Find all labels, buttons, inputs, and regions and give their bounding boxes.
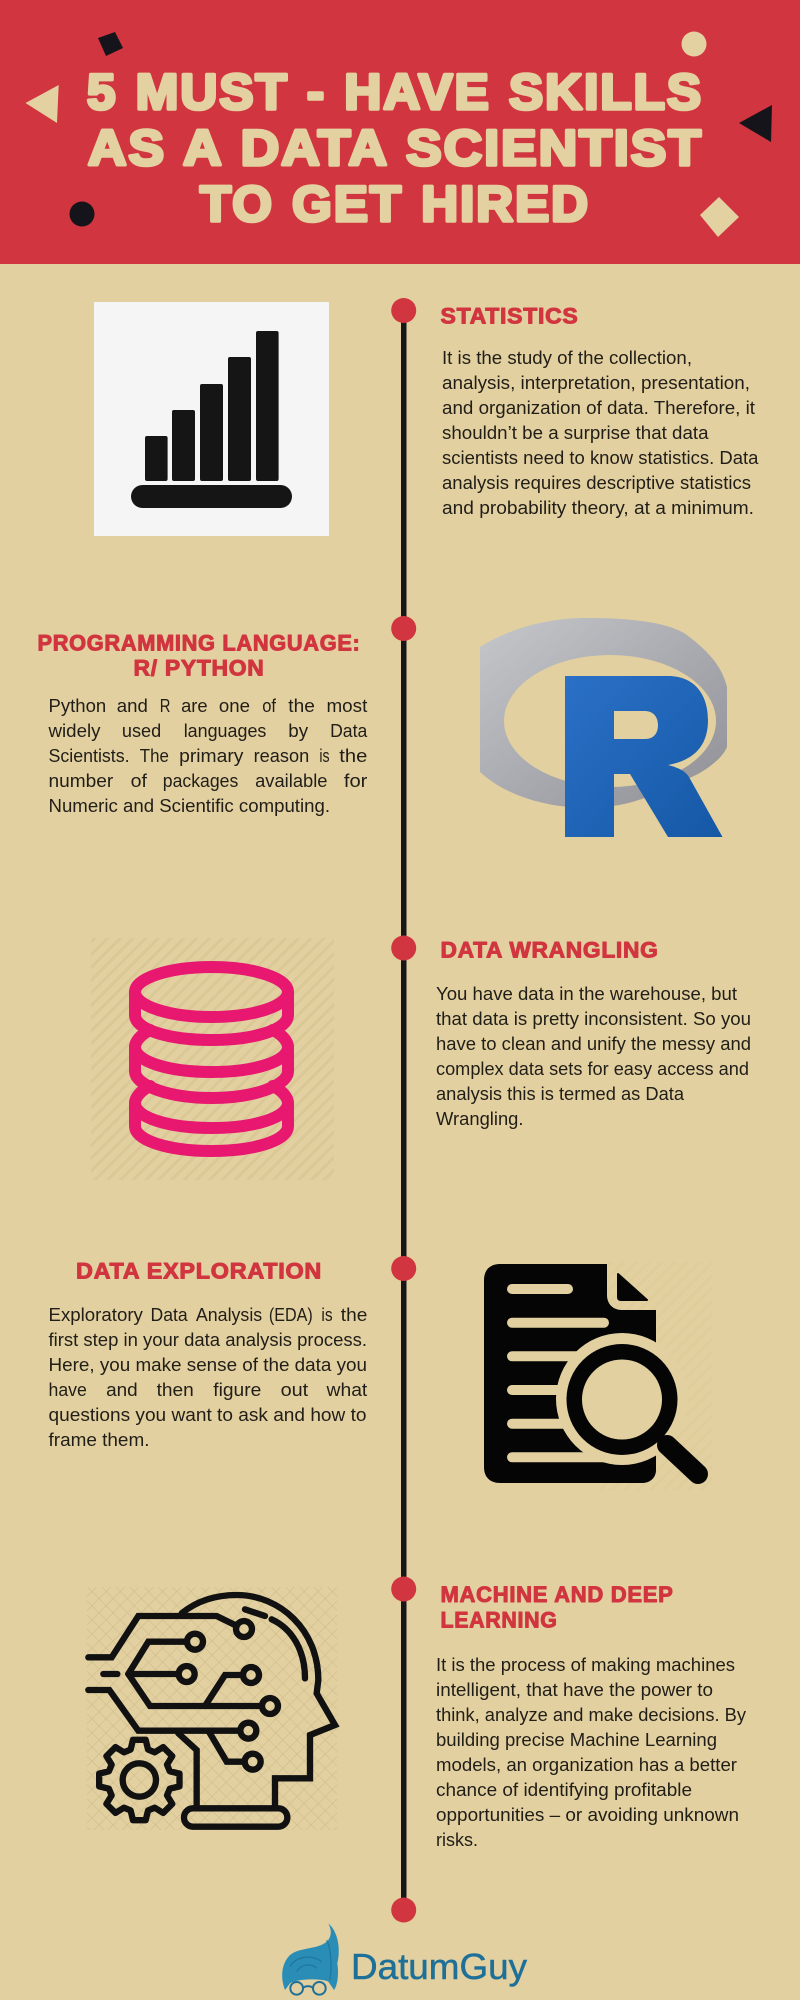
logo wordmark: DatumGuy [351,1946,527,1987]
text: machine and deep learning: building precise Machine Learning [436,1729,717,1750]
heading: programming language: PROGRAMMING LANGUAGE: [38,630,360,656]
text: programming language: is [319,745,330,766]
text: data wrangling: Wrangling. [436,1108,524,1129]
heading: data wrangling: DATA WRANGLING [440,938,658,962]
text: programming language: are [181,695,208,716]
text: programming language: languages [184,720,266,741]
title [87,64,703,232]
text: data exploration: figure [213,1379,261,1400]
text: programming language [47,695,368,816]
text: programming language: R [160,695,170,716]
text: data exploration: frame them. [48,1429,150,1450]
text: programming language: of [131,770,148,791]
icon: bar chart [94,302,329,536]
text: statistics: analysis, interpretation, presentation, [442,372,750,393]
text: data wrangling: that data is pretty inconsistent. So you [436,1008,751,1029]
heading: machine and deep learning: LEARNING [440,1608,558,1632]
panel: statistics [94,298,759,536]
icon: logo hair and glasses [282,1923,339,1995]
panel: machine and deep learning [87,1576,747,1850]
text: data exploration: Data [150,1304,188,1325]
text: data exploration [48,1304,367,1450]
text: statistics [442,347,759,518]
text: data exploration: then [157,1379,194,1400]
timeline dot: programming language [391,616,416,641]
text: data wrangling [436,983,751,1129]
text: data wrangling: complex data sets for easy access and [436,1058,749,1079]
text: statistics: scientists need to know statistics. Data [442,447,759,468]
text: programming language: and [117,695,148,716]
text: machine and deep learning: opportunities – or avoiding unknown [436,1804,739,1825]
text: data wrangling: analysis this is termed as Data [436,1083,685,1104]
title: TO GET HIRED [200,176,590,232]
text: data wrangling: have to clean and unify the messy and [436,1033,751,1054]
icon: R logo [480,618,727,837]
text: programming language: Data [330,720,368,741]
text: programming language: of [262,695,277,716]
text: statistics: and probability theory, at a minimum. [442,497,754,518]
text: data exploration: is [321,1304,333,1325]
text: programming language: Numeric and Scientific computing. [48,795,330,816]
panel: programming language [38,616,727,837]
text: data exploration: questions you want to ask and how to [48,1404,366,1425]
decorative header shapes [26,32,772,237]
text: machine and deep learning: chance of identifying profitable [436,1779,692,1800]
text: statistics: shouldn’t be a surprise that data [442,422,709,443]
text: data exploration: (EDA) [269,1304,313,1325]
heading: machine and deep learning [440,1582,674,1632]
text: programming language: one [219,695,250,716]
text: machine and deep learning: It is the process of making machines [436,1654,735,1675]
timeline line [401,310,406,1910]
heading: data exploration: DATA EXPLORATION [76,1258,322,1284]
text: programming language: widely [47,720,101,741]
text: machine and deep learning: intelligent, that have the power to [436,1679,713,1700]
icon: database [91,938,334,1180]
text: programming language: the [339,745,367,766]
text: data exploration: out [281,1379,308,1400]
text: data exploration: have [48,1379,87,1400]
text: programming language: used [122,720,161,741]
text: statistics: It is the study of the collection, [442,347,692,368]
timeline dot: statistics [391,298,416,323]
timeline dot: data wrangling [391,936,416,960]
timeline end dot [391,1898,416,1922]
text: programming language: The [140,745,169,766]
text: data exploration: first step in your data analysis process. [48,1329,367,1350]
text: programming language: by [288,720,309,741]
text: programming language: reason [254,745,309,766]
heading: machine and deep learning: MACHINE AND DEEP [440,1582,674,1607]
text: machine and deep learning: risks. [436,1829,478,1850]
text: programming language: most [326,695,367,716]
panel: data exploration [48,1256,712,1490]
text: data exploration: the [341,1304,367,1325]
timeline dot: data exploration [391,1256,416,1281]
text: data exploration: Here, you make sense of the data you [48,1354,367,1375]
text: statistics: and organization of data. Therefore, it [442,397,755,418]
text: machine and deep learning: think, analyze and make decisions. By [436,1704,747,1725]
text: programming language: available [255,770,328,791]
panel: data wrangling [91,936,751,1180]
text: programming language: the [288,695,315,716]
text: data exploration: Analysis [196,1304,262,1325]
text: machine and deep learning: models, an organization has a better [436,1754,737,1775]
icon: document with magnifier [484,1262,712,1490]
heading: statistics: STATISTICS [440,304,578,328]
text: statistics: analysis requires descriptive statistics [442,472,751,493]
text: data exploration: Exploratory [48,1304,144,1325]
text: programming language: Scientists. [48,745,130,766]
title: AS A DATA SCIENTIST [88,120,703,176]
text: programming language: packages [163,770,238,791]
heading: programming language [38,630,360,680]
text: programming language: primary [179,745,244,766]
text: programming language: number [48,770,113,791]
heading: programming language: R/ PYTHON [134,656,264,680]
text: programming language: Python [48,695,106,716]
timeline dot: machine learning [391,1576,416,1602]
header panel [0,0,800,264]
text: programming language: for [344,770,367,791]
text: data wrangling: You have data in the warehouse, but [436,983,737,1004]
text: machine and deep learning [436,1654,747,1850]
title: 5 MUST - HAVE SKILLS [87,64,703,120]
text: data exploration: what [325,1379,367,1400]
logo: DatumGuy [282,1923,527,1995]
text: data exploration: and [106,1379,138,1400]
icon: AI head with gear [87,1587,337,1830]
